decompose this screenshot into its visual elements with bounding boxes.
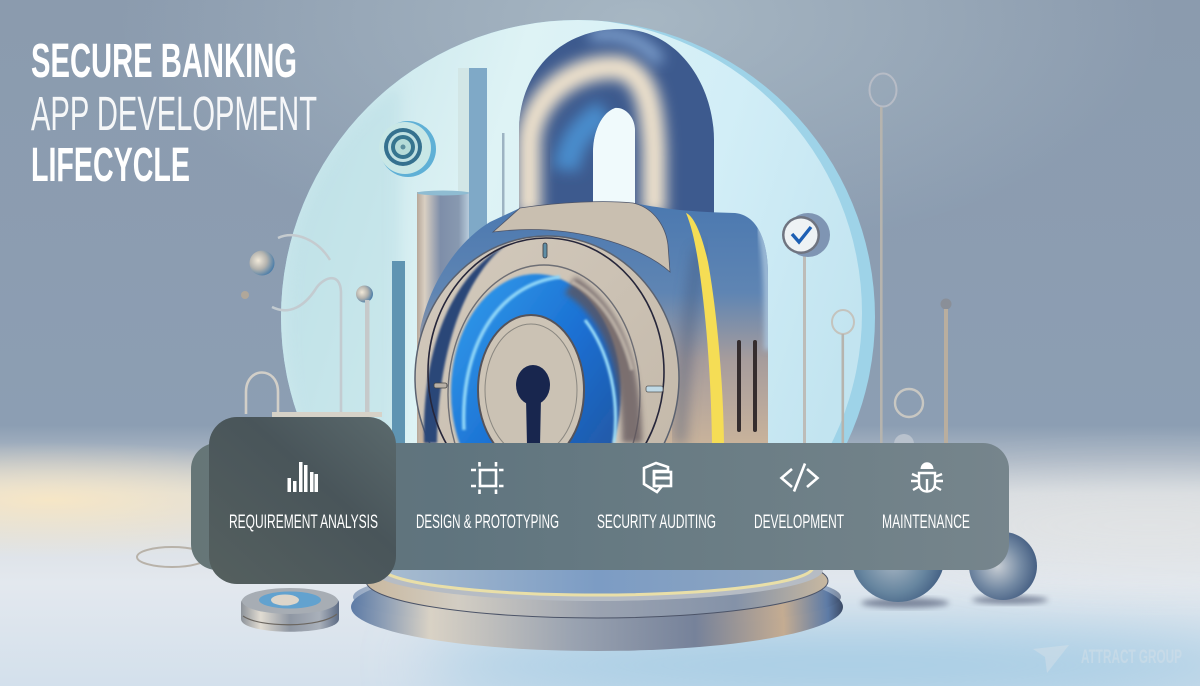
panel: lifecycle stages [191, 417, 1009, 584]
lock top flap [493, 202, 670, 272]
large pale circle backdrop [281, 20, 875, 443]
icon: shield with card [644, 463, 671, 492]
lock shackle [519, 29, 714, 212]
icon: code brackets [782, 464, 818, 492]
label: design and prototyping: DESIGN & PROTOTYPING [416, 512, 559, 533]
label: requirement analysis: REQUIREMENT ANALYSIS [229, 512, 378, 533]
stage: security auditing [597, 463, 716, 533]
label: maintenance: MAINTENANCE [882, 512, 970, 533]
label: development: DEVELOPMENT [754, 512, 844, 533]
metal spheres [851, 508, 1048, 608]
stage: design and prototyping [416, 462, 559, 533]
label: security auditing: SECURITY AUDITING [597, 512, 716, 533]
yellow stripe [686, 213, 724, 443]
platform base [351, 539, 843, 651]
icon: bar chart [288, 462, 318, 492]
icon: frame [471, 462, 504, 494]
icon: bug [911, 462, 943, 492]
keyhole [516, 365, 550, 446]
vents [737, 340, 757, 432]
logo: attract group watermark [1033, 645, 1182, 673]
stage: maintenance [882, 462, 970, 533]
icon: target disc [379, 121, 436, 177]
icon: check badge [782, 213, 830, 257]
title: APP DEVELOPMENT [31, 88, 317, 141]
dial [415, 236, 679, 525]
title: LIFECYCLE [31, 139, 190, 192]
metal puck [241, 588, 339, 632]
stage: requirement analysis [229, 462, 378, 533]
stage: development [754, 464, 844, 533]
title [31, 35, 317, 192]
shackle opening glow [593, 108, 635, 208]
decorative background objects left [137, 68, 504, 567]
icon: paper plane [1033, 645, 1069, 673]
active stage highlight card [209, 417, 396, 584]
title: SECURE BANKING [31, 35, 297, 88]
lock body [410, 200, 775, 445]
decorative pins right [782, 74, 952, 454]
padlock [414, 29, 768, 443]
